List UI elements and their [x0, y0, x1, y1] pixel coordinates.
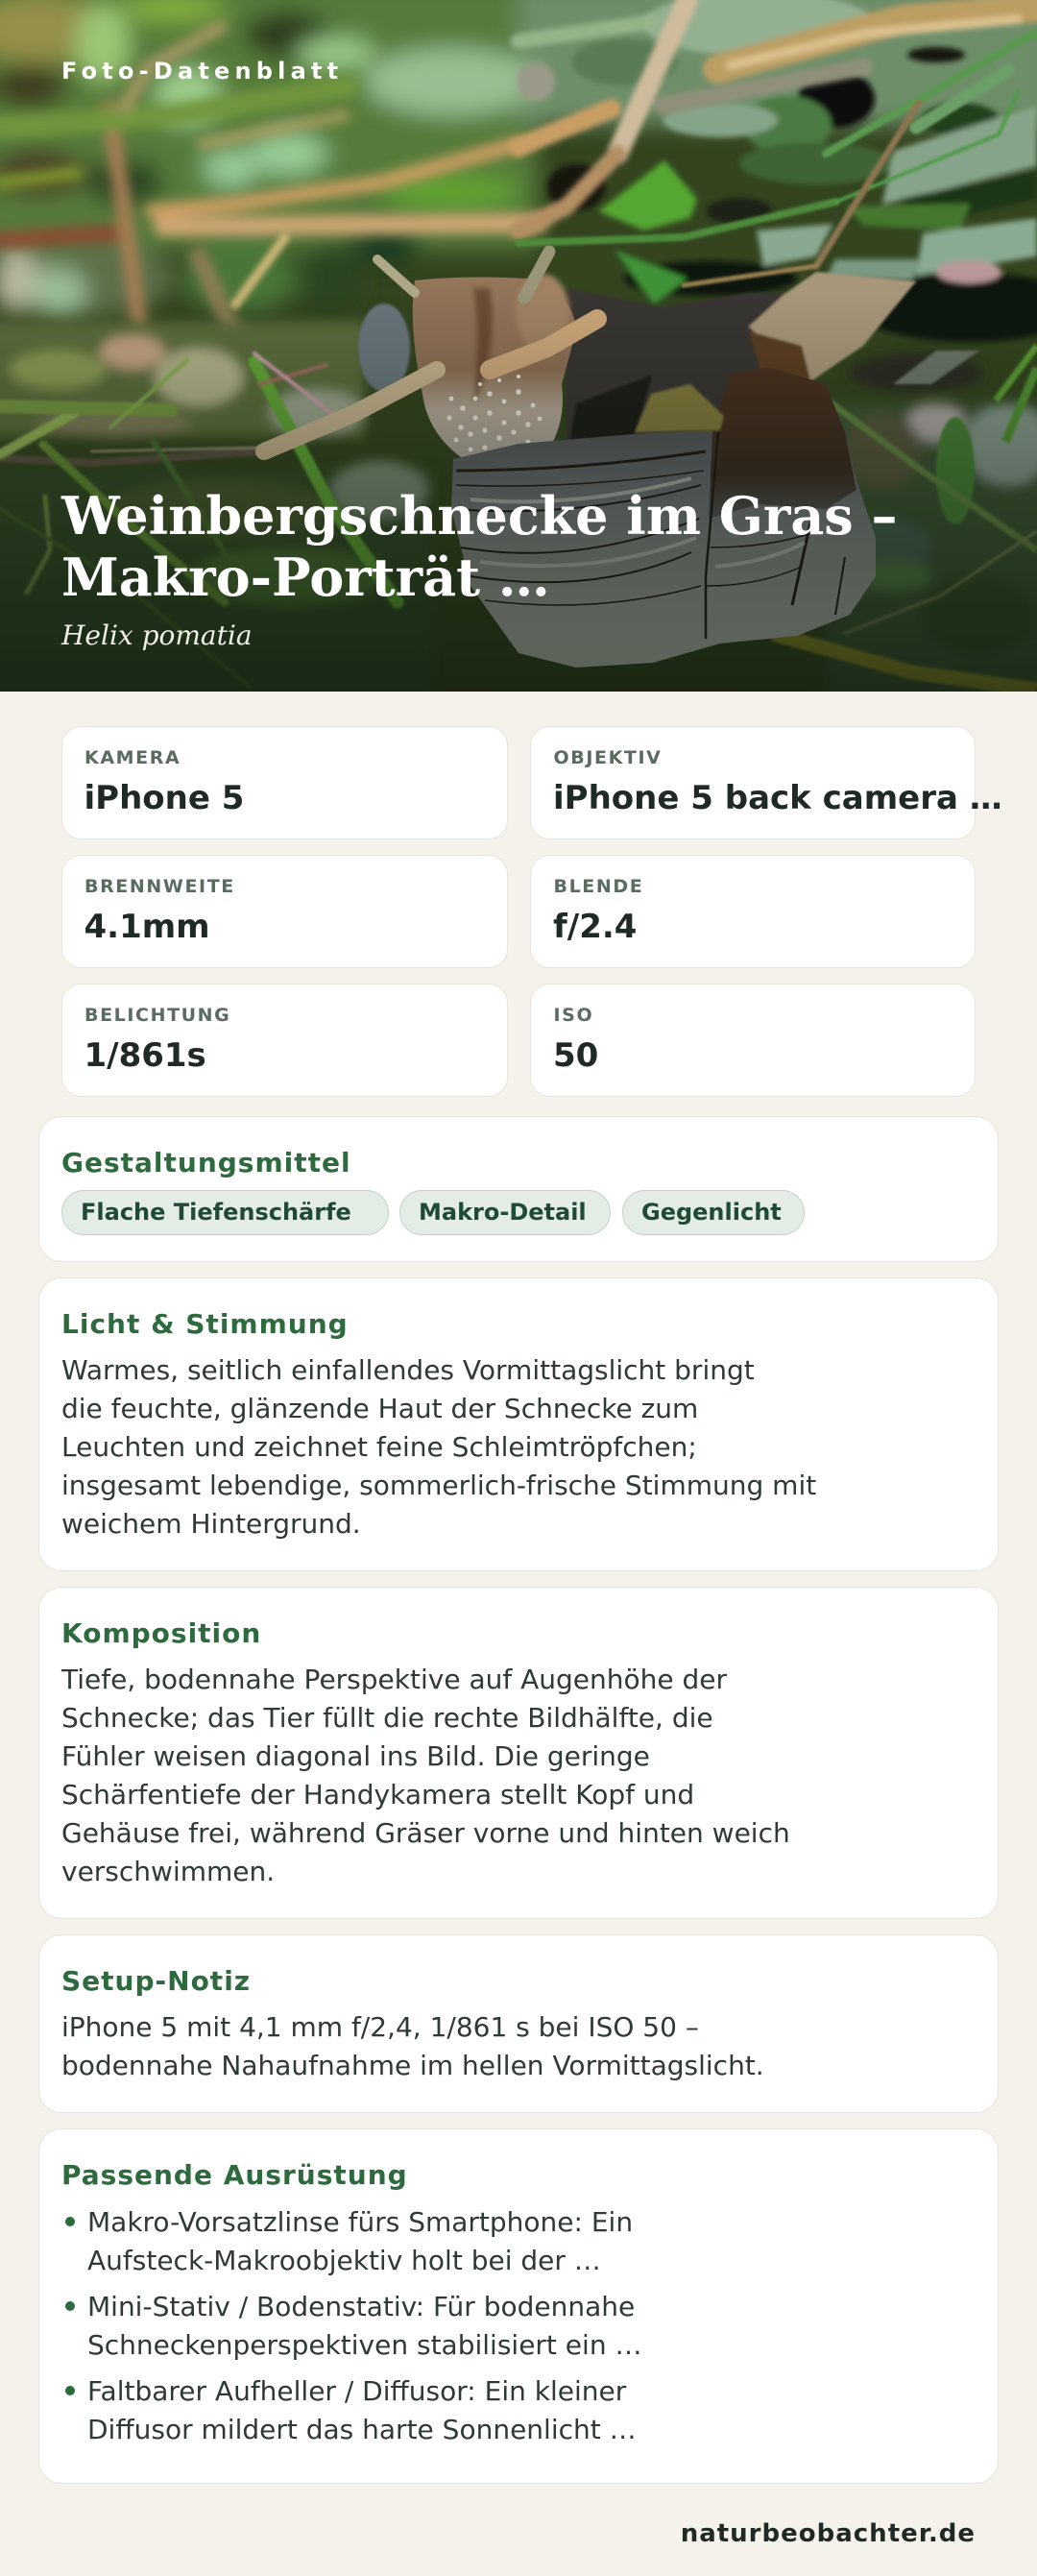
eyebrow label: Foto-Datenblatt [61, 58, 343, 85]
list item: Diffusor mildert das harte Sonnenlicht … [87, 2414, 637, 2445]
body text: Gehäuse frei, während Gräser vorne und hinten weich [61, 1817, 790, 1849]
footer brand: naturbeobachter.de [681, 2519, 976, 2548]
list item [65, 2291, 641, 2361]
bottom shade overlay [0, 288, 1037, 692]
dark gaps and leaves, right [517, 0, 1037, 342]
chip: Gegenlicht [641, 1199, 782, 1226]
snail shell [451, 367, 876, 668]
chip [622, 1190, 805, 1235]
body text: Leuchten und zeichnet feine Schleimtröpfchen; [61, 1431, 697, 1463]
value: f/2.4 [553, 908, 637, 946]
snail tentacles [264, 252, 597, 451]
body text [61, 1354, 816, 1540]
right grass and leaves [826, 353, 1037, 711]
hero: photo with title overlay [0, 0, 1037, 692]
body text [61, 2011, 764, 2081]
snail [264, 252, 916, 668]
heading: Komposition [61, 1617, 261, 1649]
body text: Tiefe, bodennahe Perspektive auf Augenhöhe der [61, 1664, 727, 1695]
body text: Warmes, seitlich einfallendes Vormittagslicht bringt [61, 1354, 755, 1386]
panel: composition [38, 1587, 999, 1919]
chip: Flache Tiefenschärfe [81, 1199, 351, 1226]
heading: Gestaltungsmittel [61, 1147, 351, 1179]
panel: design elements [38, 1116, 999, 1262]
body text: iPhone 5 mit 4,1 mm f/2,4, 1/861 s bei ISO 50 – [61, 2011, 699, 2043]
spec card: lens [530, 726, 976, 839]
panel: light and mood [38, 1277, 999, 1571]
panel: setup note [38, 1934, 999, 2113]
body text: bodennahe Nahaufnahme im hellen Vormittagslicht. [61, 2050, 764, 2081]
label: BLENDE [553, 876, 643, 897]
panel: suitable equipment [38, 2128, 999, 2484]
species name: Helix pomatia [61, 620, 253, 651]
heading: Licht & Stimmung [61, 1308, 349, 1340]
title [61, 485, 898, 608]
list item: Makro-Vorsatzlinse fürs Smartphone: Ein [87, 2206, 633, 2238]
value: iPhone 5 [84, 779, 244, 817]
spec card: ISO [530, 984, 976, 1097]
chip [61, 1190, 389, 1235]
heading: Setup-Notiz [61, 1965, 251, 1997]
chip [399, 1190, 611, 1235]
heading: Passende Ausrüstung [61, 2159, 408, 2191]
label: BELICHTUNG [84, 1005, 230, 1026]
title: Weinbergschnecke im Gras – [61, 485, 898, 547]
label: KAMERA [84, 747, 181, 768]
value: 4.1mm [84, 908, 210, 946]
value: iPhone 5 back camera … [553, 779, 1002, 817]
list item [65, 2206, 633, 2276]
mid-left grass clutter [0, 322, 432, 711]
spec card: focal length [61, 855, 507, 968]
list item: Schneckenperspektiven stabilisiert ein … [87, 2329, 641, 2361]
body text: insgesamt lebendige, sommerlich-frische Stimmung mit [61, 1470, 816, 1501]
value: 1/861s [84, 1036, 206, 1075]
body text: Schnecke; das Tier füllt die rechte Bildhälfte, die [61, 1702, 713, 1734]
label: BRENNWEITE [84, 876, 235, 897]
list item: Faltbarer Aufheller / Diffusor: Ein kleiner [87, 2375, 626, 2407]
spec card: camera [61, 726, 507, 839]
list item [65, 2375, 637, 2445]
body text: Fühler weisen diagonal ins Bild. Die geringe [61, 1740, 650, 1772]
body text: weichem Hintergrund. [61, 1508, 361, 1540]
background foliage, top [0, 0, 1037, 318]
body text: verschwimmen. [61, 1856, 275, 1887]
photo: snail in grass [0, 0, 1037, 692]
chip: Makro-Detail [419, 1199, 587, 1226]
label: OBJEKTIV [553, 747, 662, 768]
title: Makro-Porträt … [61, 547, 550, 608]
list item: Mini-Stativ / Bodenstativ: Für bodennahe [87, 2291, 635, 2322]
snail body [358, 272, 916, 461]
label: ISO [553, 1005, 593, 1026]
body text: Schärfentiefe der Handykamera stellt Kopf und [61, 1779, 694, 1810]
value: 50 [553, 1036, 598, 1075]
blurred twigs, foreground [0, 0, 1037, 336]
snail head [413, 274, 576, 462]
body text [61, 1664, 790, 1887]
spec card: exposure [61, 984, 507, 1097]
list item: Aufsteck-Makroobjektiv holt bei der … [87, 2245, 601, 2276]
body text: die feuchte, glänzende Haut der Schnecke zum [61, 1393, 698, 1424]
spec card: aperture [530, 855, 976, 968]
